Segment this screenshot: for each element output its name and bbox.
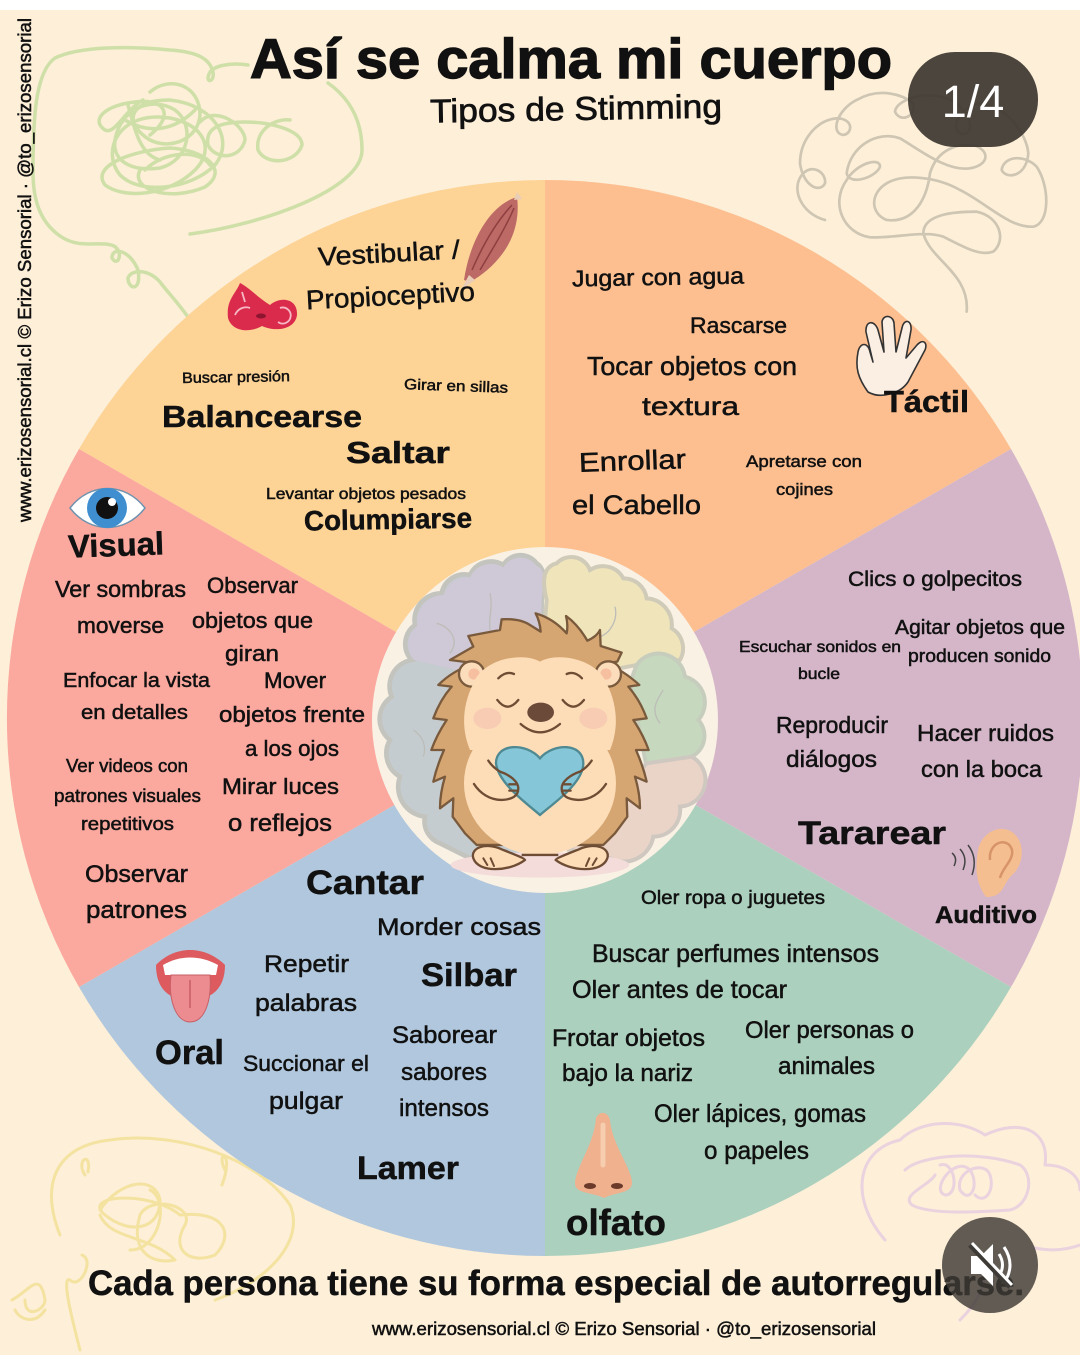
item: Lamer [357,1150,459,1186]
item [243,1051,369,1115]
item: o reflejos [228,810,332,837]
icon: eye [70,488,145,528]
item: Tararear [798,815,946,851]
panel: vestibular / propioceptivo slice [79,180,545,718]
item: intensos [399,1095,489,1122]
subtitle: Tipos de Stimming [430,87,722,130]
item [587,351,797,421]
item: Ver videos con [66,756,188,776]
item: Columpiarse [304,503,472,536]
item [222,774,339,837]
item: Succionar el [243,1051,369,1076]
item [55,576,186,638]
closing message: Cada persona tiene su forma especial de autorregularse. [88,1264,1024,1303]
item: Buscar perfumes intensos [592,940,879,968]
item: Saltar [346,435,450,470]
panel: visual slice [7,449,545,987]
item: a los ojos [245,736,339,761]
icon: hand [857,316,926,395]
panel text: auditivo [739,568,1065,929]
item: Apretarse con [746,452,862,471]
badge: slide counter: 1/4 [942,76,1004,127]
item: objetos que [192,608,313,633]
icon: muscle [461,192,522,290]
item [392,1022,497,1122]
item: Observar [85,861,188,888]
center medallion: brain and hedgehog [372,547,718,893]
item: Oler personas o [745,1017,914,1044]
item: Oler ropa o juguetes [641,888,825,909]
item: Hacer ruidos [917,720,1054,746]
item: Repetir [264,951,349,978]
item: Oler lápices, gomas [654,1100,866,1128]
item: giran [225,641,279,666]
illustration: pastel brain [380,555,705,878]
illustration: hedgehog holding heart [431,613,649,869]
heading: Vestibular / Propioceptivo: Vestibular / [317,234,461,272]
item: palabras [255,990,357,1017]
scribble: yellow tangle [12,1138,293,1350]
heading: olfato: olfato [566,1202,666,1243]
item: Jugar con agua [572,262,744,291]
item: moverse [77,613,164,638]
panel: auditivo slice [545,449,1080,987]
panel text: visual [54,525,365,924]
item: Morder cosas [377,914,541,941]
item: Girar en sillas [404,376,508,397]
heading: Auditivo: Auditivo [935,902,1037,929]
item: textura [642,391,740,421]
item: en detalles [81,702,188,724]
item [85,861,188,924]
panel: táctil slice [545,180,1011,718]
item: Tocar objetos con [587,351,797,381]
item [572,444,701,520]
item: diálogos [786,746,877,772]
item: objetos frente [219,702,365,727]
item [654,1100,866,1165]
footer credit: www.erizosensorial.cl © Erizo Sensorial · @to_erizosensorial [371,1319,876,1340]
title: Así se calma mi cuerpo [250,27,892,90]
item: Enrollar [578,444,686,478]
panel: oral slice [79,718,545,1256]
scribble: green tangle [33,48,362,320]
item: Clics o golpecitos [848,568,1022,591]
panel text: vestibular / propioceptivo [162,234,508,536]
item [552,1025,705,1087]
item [63,670,211,724]
item [746,452,862,499]
item: Ver sombras [55,576,186,602]
item [739,639,901,683]
scribble: pink tangle [862,1124,1080,1320]
item: sabores [401,1059,487,1086]
item: Oler antes de tocar [572,976,787,1004]
item [895,617,1065,666]
panel text: oral [155,864,541,1186]
item: Agitar objetos que [895,617,1065,639]
item: Escuchar sonidos en [739,639,901,656]
heading: Oral: Oral [155,1034,224,1072]
item: patrones visuales [54,786,201,806]
item [917,720,1054,782]
item: animales [778,1053,875,1080]
item: pulgar [269,1088,343,1115]
item: repetitivos [81,814,174,834]
item: Mirar luces [222,774,339,799]
panel text: táctil [572,262,969,520]
item [255,951,357,1017]
side credit: www.erizosensorial.cl © Erizo Sensorial · @to_erizosensorial [15,18,36,523]
panel text: olfato [552,888,914,1243]
item [192,573,313,666]
item [54,756,201,834]
icon: inner ear vestibular organ [228,283,297,330]
item: Reproducir [776,712,888,738]
item: Balancearse [162,399,362,434]
heading: Visual: Visual [67,525,165,565]
item: cojines [776,480,833,499]
icon: mouth and tongue [156,950,225,1022]
item: bajo la nariz [562,1060,693,1087]
item: Observar [207,573,298,598]
item: Frotar objetos [552,1025,705,1052]
item [745,1017,914,1080]
button: muted audio [942,1217,1038,1313]
item: Cantar [306,864,424,902]
item: bucle [798,666,840,683]
item: o papeles [704,1137,809,1165]
badge: slide counter [908,52,1038,147]
scribble: tan brain doodle [797,93,1046,312]
item: con la boca [921,756,1042,782]
heading: Vestibular / Propioceptivo: Propioceptivo [305,277,476,315]
wheel of senses [7,180,1080,1256]
item: Levantar objetos pesados [266,486,466,503]
icon: nose [575,1113,632,1198]
item: producen sonido [908,646,1051,666]
item: patrones [86,897,187,924]
item: Silbar [421,957,517,993]
item: Enfocar la vista [63,670,211,692]
item: Mover [264,668,326,693]
heading: Táctil: Táctil [884,384,969,419]
item [219,668,365,761]
icon: ear with sound waves [952,829,1022,897]
item [776,712,888,772]
panel: olfato slice [545,718,1011,1256]
heading: Vestibular / Propioceptivo [305,234,476,315]
item: Buscar presión [182,368,290,387]
item: Rascarse [690,313,787,338]
item: Saborear [392,1022,497,1049]
item: el Cabello [572,490,701,520]
